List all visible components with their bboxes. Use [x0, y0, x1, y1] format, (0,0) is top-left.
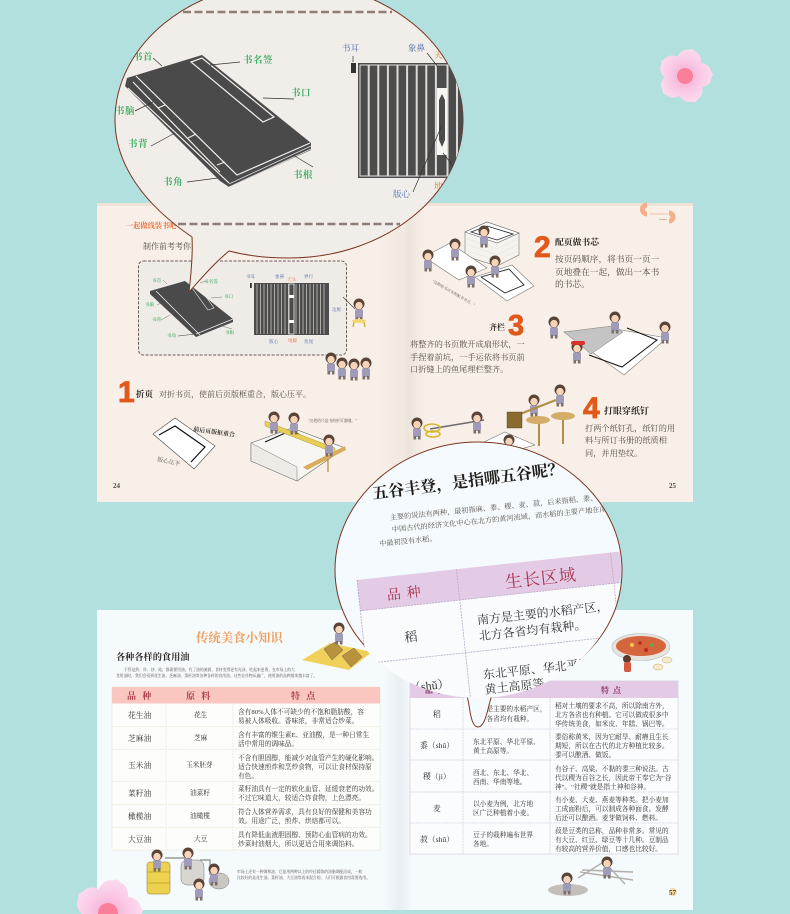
- row: corn oil: 不含有胆固醇，能减少对血管产生的硬化影响。: [238, 753, 378, 763]
- row: soybean oil: 炒菜时油烟大，所以更适合用来调馅料。: [238, 839, 358, 849]
- row: millet shu: [420, 732, 669, 759]
- large book labels: 书背: [128, 138, 148, 150]
- table header: 特 点: [601, 685, 622, 695]
- paragraph: [380, 494, 606, 546]
- row: soybean: 豆子的栽种遍布世界: [473, 830, 533, 839]
- heading: let's make a thread-bound book: 一起做线装书吧: [126, 221, 177, 230]
- small book diagram: 书名签: [204, 278, 218, 285]
- illustration: collating pages: [422, 222, 534, 307]
- row: wheat: 区广泛种植着小麦。: [473, 808, 533, 817]
- row: wheat: 以小麦为例，北方地: [473, 799, 533, 809]
- row: peanut oil: 花生: [194, 710, 208, 719]
- illustration: pressing the pages: [251, 412, 357, 481]
- row: soybean oil: 大豆油: [128, 834, 152, 844]
- row: soybean: 有较高的营养价值，口感也比较好。: [555, 844, 662, 854]
- row: millet shu: 黄土高原等。: [473, 746, 513, 755]
- row: rapeseed oil: 菜籽油具有一定的软化血管、延缓衰老的功效。: [238, 784, 378, 793]
- row: sesame oil: 芝麻: [194, 733, 208, 742]
- small book diagram: 书根: [225, 329, 235, 336]
- row: corn oil: [128, 753, 378, 780]
- page number 25: 25: [669, 482, 676, 490]
- large page grid diagram: [342, 43, 470, 199]
- row: millet ji: 有谷子、高粱、不黏的黍三种说法。古: [555, 764, 669, 773]
- heading: five grains question: 五谷丰登，是指哪五谷呢？: [371, 459, 565, 504]
- step 2 description: 按页码顺序，将书页一页一: [555, 253, 660, 265]
- row: rice: 北方各省均有栽种。: [473, 714, 533, 723]
- row: corn oil: 玉米油: [128, 760, 152, 770]
- row: millet shu: 东北平原、华北平原、: [473, 737, 540, 746]
- row: peanut oil: 易被人体吸收。香味浓，非常适合炒菜。: [238, 716, 358, 726]
- illustration: folded page: 版心压平: [157, 455, 181, 468]
- dashed stitching lines: [178, 12, 400, 224]
- large book labels: 书首: [133, 51, 153, 63]
- caption paragraph: 比较好的是花生油、菜籽油、大豆油等再来混合的，人们可根据食用需要选用。: [237, 875, 370, 880]
- magnified table: 生长区域: [504, 565, 578, 592]
- row: soybean: 各地。: [473, 839, 493, 848]
- row: olive oil: [128, 807, 372, 826]
- row: peanut oil: 花生油: [128, 710, 152, 720]
- step 3 description: 手捏着前坑，一手运依将书页前: [410, 352, 525, 363]
- magnified table: 黍（shǔ）: [396, 676, 450, 696]
- step 3 heading: 齐栏: [489, 322, 505, 332]
- illustration: folded page: 前后页版框重合: [193, 425, 235, 439]
- step 1 number: 1: [118, 376, 135, 409]
- magnified table: 东北平原、华北平原、: [482, 654, 603, 682]
- row: soybean: 菽（shū）: [420, 834, 454, 844]
- small page grid diagram: 版心: [269, 338, 279, 345]
- illustration: folded page: [153, 418, 235, 469]
- small book diagram: 书背: [152, 316, 162, 323]
- small page grid diagram: 界行: [304, 273, 314, 280]
- row: olive oil: 符合人体营养需求，具有良好的保健和美容功: [238, 807, 372, 817]
- table header: 原 料: [186, 690, 212, 701]
- subheading: edible oils: 各种各样的食用油: [116, 651, 190, 662]
- illustration: drilling and scissors: [412, 384, 575, 456]
- intro paragraph: 不管是煎、炸、炒、炖，都需要用油。有了油的滋润，食材变得更有光泽，吃起来更香。在市场上的大: [124, 667, 295, 672]
- row: corn oil: 适合快速煎炸和烹炒食物，可以让食材保持原: [238, 762, 372, 772]
- magnified table: 北方各省均有栽种。: [478, 617, 587, 643]
- small book diagram: 书口: [224, 293, 234, 300]
- row: millet shu: 黍俗称黄米，因为它耐旱、耐瘠且生长: [555, 732, 669, 742]
- row: sesame oil: 活中常用的调味品。: [238, 739, 298, 748]
- row: millet ji: 西南、华南等地。: [473, 777, 526, 786]
- row: rapeseed oil: 不过它味道大，较适合炸食物，上色漂亮。: [238, 793, 365, 803]
- paragraph: 中最初没有水稻。: [379, 534, 437, 548]
- table: edible oils: [112, 687, 380, 850]
- step 4 description: 料与所订书册的纸质相: [585, 435, 667, 445]
- row: corn oil: 有色。: [238, 771, 258, 780]
- magnified table: 稻: [404, 629, 418, 645]
- magnified table: 南方是主要的水稻产区，: [476, 598, 609, 627]
- table header: 特 点: [291, 690, 317, 701]
- magnifier: binding parts: [115, 0, 470, 292]
- illustration: teacher pointing on stool: [343, 297, 366, 327]
- step 2 heading: 配页做书芯: [555, 236, 600, 247]
- row: olive oil: 橄榄油: [128, 811, 152, 821]
- row: rice: 北方各省也有种植。它可以做成很多中: [555, 710, 669, 719]
- row: soybean: 有大豆、红豆、绿豆等十几种。豆制品: [555, 835, 669, 844]
- row: millet shu: 黍可以酿酒、做饭。: [555, 750, 615, 759]
- row: sesame oil: 含有丰富的维生素E、亚油酸，是一种日常生: [238, 730, 369, 740]
- row: millet shu: 期短，所以在古代的北方种植比较多。: [555, 741, 669, 751]
- row: soybean oil: [128, 830, 372, 849]
- illustration: big bowl and girl: [612, 634, 672, 672]
- row: wheat: 工成面粉后，可以制成各种面食。发酵: [555, 804, 669, 814]
- icon: cherry blossom bottom left: [62, 869, 154, 914]
- small book diagram: [145, 277, 235, 339]
- small book diagram: 书脑: [145, 301, 155, 308]
- magnified table: 品种: [386, 584, 428, 604]
- small page grid diagram: 边框: [332, 306, 342, 313]
- row: peanut oil: [128, 707, 364, 726]
- magnifier: five grains: [334, 442, 622, 728]
- ribbon decoration: [643, 205, 673, 221]
- large book labels: 书根: [293, 169, 313, 181]
- row: millet shu: 黍（shǔ）: [420, 740, 454, 750]
- row: millet ji: 西北、东北、华北、: [473, 768, 533, 777]
- row: millet ji: [423, 764, 672, 791]
- step 4 number: 4: [583, 392, 600, 425]
- panel: dashed parts diagram: [138, 261, 346, 355]
- row: wheat: 后还可以酿酒。麦芽做饲料、燃料。: [555, 813, 662, 822]
- step 3 description: 口折缝上的鱼尾理栏整齐。: [410, 364, 508, 374]
- small book diagram: 书角: [167, 332, 177, 339]
- large book labels: 书口: [291, 87, 311, 99]
- step 4 description: [585, 423, 675, 459]
- paragraph: 中国古代的经济文化中心在北方的黄河流域，而水稻的主要产地在南方，: [391, 503, 621, 535]
- panel: food knowledge spread: [97, 610, 693, 910]
- row: peanut oil: 含有80%人体不可缺少的不饱和脂肪酸，容: [238, 707, 364, 717]
- row: millet ji: 稷（jì）: [423, 771, 451, 781]
- row: soybean: [420, 826, 669, 854]
- row: rapeseed oil: 油菜籽: [190, 788, 210, 797]
- small page grid diagram: 鱼尾: [304, 338, 314, 345]
- large page grid diagram: 版心: [393, 189, 411, 199]
- row: soybean oil: 具有降低血液胆固醇、预防心血管病的功效。: [238, 830, 372, 839]
- page number 57: [669, 888, 677, 896]
- large book labels: 书名签: [243, 54, 273, 66]
- step 2 description: 页地叠在一起，做出一本书: [555, 266, 660, 278]
- text: quiz before making: 制作前考考你: [143, 241, 192, 251]
- illustration: four students: [326, 352, 372, 380]
- step 3 description: [410, 339, 525, 374]
- step 4 heading: 打眼穿纸钉: [604, 405, 649, 416]
- step 3 number: 3: [508, 310, 524, 342]
- illustration: kids with straw: [548, 856, 633, 896]
- large page grid diagram: 地脚: [434, 181, 452, 191]
- illustration: pressing the pages: "这把的尺是书的折页器哦。": [308, 418, 357, 423]
- caption paragraph: 市场上还有一种调和油，它是用两种以上的经过精炼的油脂调配而成。一般: [237, 869, 362, 874]
- small page grid diagram: 象鼻: [275, 273, 285, 280]
- small page grid diagram: 天头: [287, 276, 297, 283]
- magnified table: [356, 552, 621, 698]
- small page grid diagram: [246, 273, 342, 345]
- large page grid diagram: 天头: [434, 50, 452, 60]
- row: wheat: [433, 795, 669, 822]
- illustration: collating pages: "这和给书页本的配书书页。": [432, 279, 477, 307]
- row: millet ji: 代以稷为百谷之长，因此帝王奉它为"谷: [555, 773, 672, 783]
- row: rice: 稻对土壤的要求不高，所以除南方外，: [555, 701, 669, 711]
- row: rice: [433, 701, 669, 729]
- table header: 品 种: [127, 690, 153, 701]
- large page grid diagram: 象鼻: [408, 43, 426, 53]
- row: sesame oil: 芝麻油: [128, 733, 152, 743]
- large book labels: 书角: [163, 176, 183, 188]
- table header: [127, 690, 317, 701]
- panel: book binding spread: [97, 203, 693, 502]
- row: olive oil: 油橄榄: [190, 811, 210, 820]
- table header: 品 种: [425, 685, 446, 695]
- illustration: fanning pages: [548, 312, 670, 375]
- large book diagram: [125, 55, 311, 187]
- large page grid diagram: 书耳: [342, 43, 360, 53]
- small page grid diagram: 地脚: [288, 337, 298, 344]
- step 1 heading: 折页: [136, 389, 154, 399]
- illustration: sesame oil workshop: [302, 622, 372, 670]
- large book labels: 书脑: [115, 105, 135, 117]
- heading: traditional food knowledge: 传统美食小知识: [196, 630, 284, 645]
- paragraph: 主要的说法有两种，最初指麻、黍、稷、麦、菽，后来指稻、黍、稷、麦、菽。: [389, 489, 641, 523]
- caption paragraph: [237, 869, 370, 880]
- intro paragraph: 食用油时，我们会看到花生油、芝麻油、菜籽油等各种各样的食用油。这些农作物从遍广，使用油的品种越来越丰富了。: [116, 673, 317, 678]
- panel: food knowledge spread: 57: [669, 889, 676, 897]
- row: rice: 南方是主要的水稻产区，: [473, 704, 547, 714]
- intro paragraph: [116, 667, 317, 678]
- step 1 description: 对折书页，使前后页版框重合，版心压平。: [159, 389, 311, 400]
- small page grid diagram: 书耳: [246, 273, 256, 280]
- step 2 description: [555, 253, 660, 289]
- row: corn oil: 玉米胚芽: [186, 760, 213, 769]
- row: sesame oil: [128, 730, 369, 748]
- row: soybean: 菽是豆类的总称，品种非常多。常见的: [555, 826, 669, 836]
- icon: cherry blossom top right: [648, 41, 722, 113]
- step 4 description: 同，并用垫纹。: [585, 448, 642, 459]
- row: rice: 华传统美食，如米皮、年糕、锅巴等。: [555, 719, 669, 729]
- page number 24: 24: [113, 482, 120, 490]
- small book diagram: 书首: [152, 277, 162, 284]
- row: wheat: 有小麦、大麦、燕麦等种类。把小麦加: [555, 795, 669, 804]
- row: olive oil: 效。用途广泛，煎炸、烘焙都可以。: [238, 816, 345, 826]
- large book labels: [115, 51, 313, 188]
- step 3 description: 将整齐的书页散开成扇形状，一: [410, 339, 525, 350]
- row: rice: 稻: [433, 709, 441, 719]
- row: soybean oil: 大豆: [194, 834, 208, 843]
- table: five grains: [410, 681, 678, 854]
- magnified table: 黄土高原等。: [484, 674, 557, 697]
- step 4 description: 打两个纸钉孔，纸钉的用: [585, 423, 675, 434]
- step 2 description: 的书芯。: [555, 278, 590, 289]
- row: wheat: 麦: [433, 803, 441, 813]
- illustration: oil barrels and kids: [147, 848, 229, 900]
- row: rapeseed oil: [128, 784, 378, 803]
- step 2 number: 2: [534, 231, 551, 264]
- row: millet ji: 神"。"社稷"就是指土神和谷神。: [555, 782, 650, 791]
- table header: [425, 685, 622, 695]
- row: rapeseed oil: 菜籽油: [128, 788, 152, 798]
